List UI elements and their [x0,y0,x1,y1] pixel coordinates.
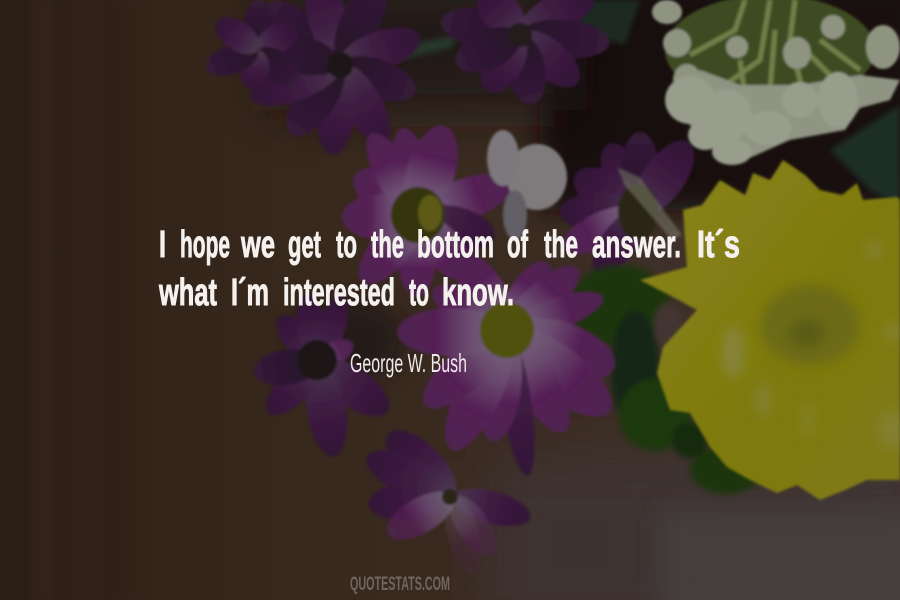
watermark: QUOTESTATS.COM [350,574,450,595]
quote line 1: get [288,224,321,266]
quote line 2: what [158,272,217,314]
quote line 2: I´m [231,272,269,314]
foliage: dark leaves [380,0,900,205]
quote line 1: to [336,224,357,266]
quote line 2: interested [283,272,395,314]
author: George W. Bush [350,348,467,378]
quote line 1: bottom [417,224,494,266]
quote line 2 [158,272,514,314]
flower: small dark lower left [251,292,399,460]
flower: bottom small [359,419,534,578]
flower: top purple left [244,0,426,156]
quote line 1: I [159,224,166,266]
quote line 1: we [240,224,275,266]
flower: right purple [556,130,706,284]
flower: large yellow [640,160,900,500]
foliage: green pompons [570,265,762,494]
quote line 1: of [507,224,528,266]
flower: top purple centre [438,0,611,107]
flower: upper centre [342,119,567,297]
quote line 1: the [371,224,404,266]
flower: top small left [201,0,306,93]
flower: white hydrangea [652,0,900,165]
quote text [158,224,740,314]
quote line 1: hope [180,224,230,266]
quote line 2: to [409,272,429,314]
quote line 1: It´s [697,224,740,266]
quote line 1: the [544,224,578,266]
quote line 2: know. [442,272,514,314]
quote line 1: answer. [592,224,681,266]
quote line 1 [159,224,740,266]
flower: centre large [397,244,625,478]
